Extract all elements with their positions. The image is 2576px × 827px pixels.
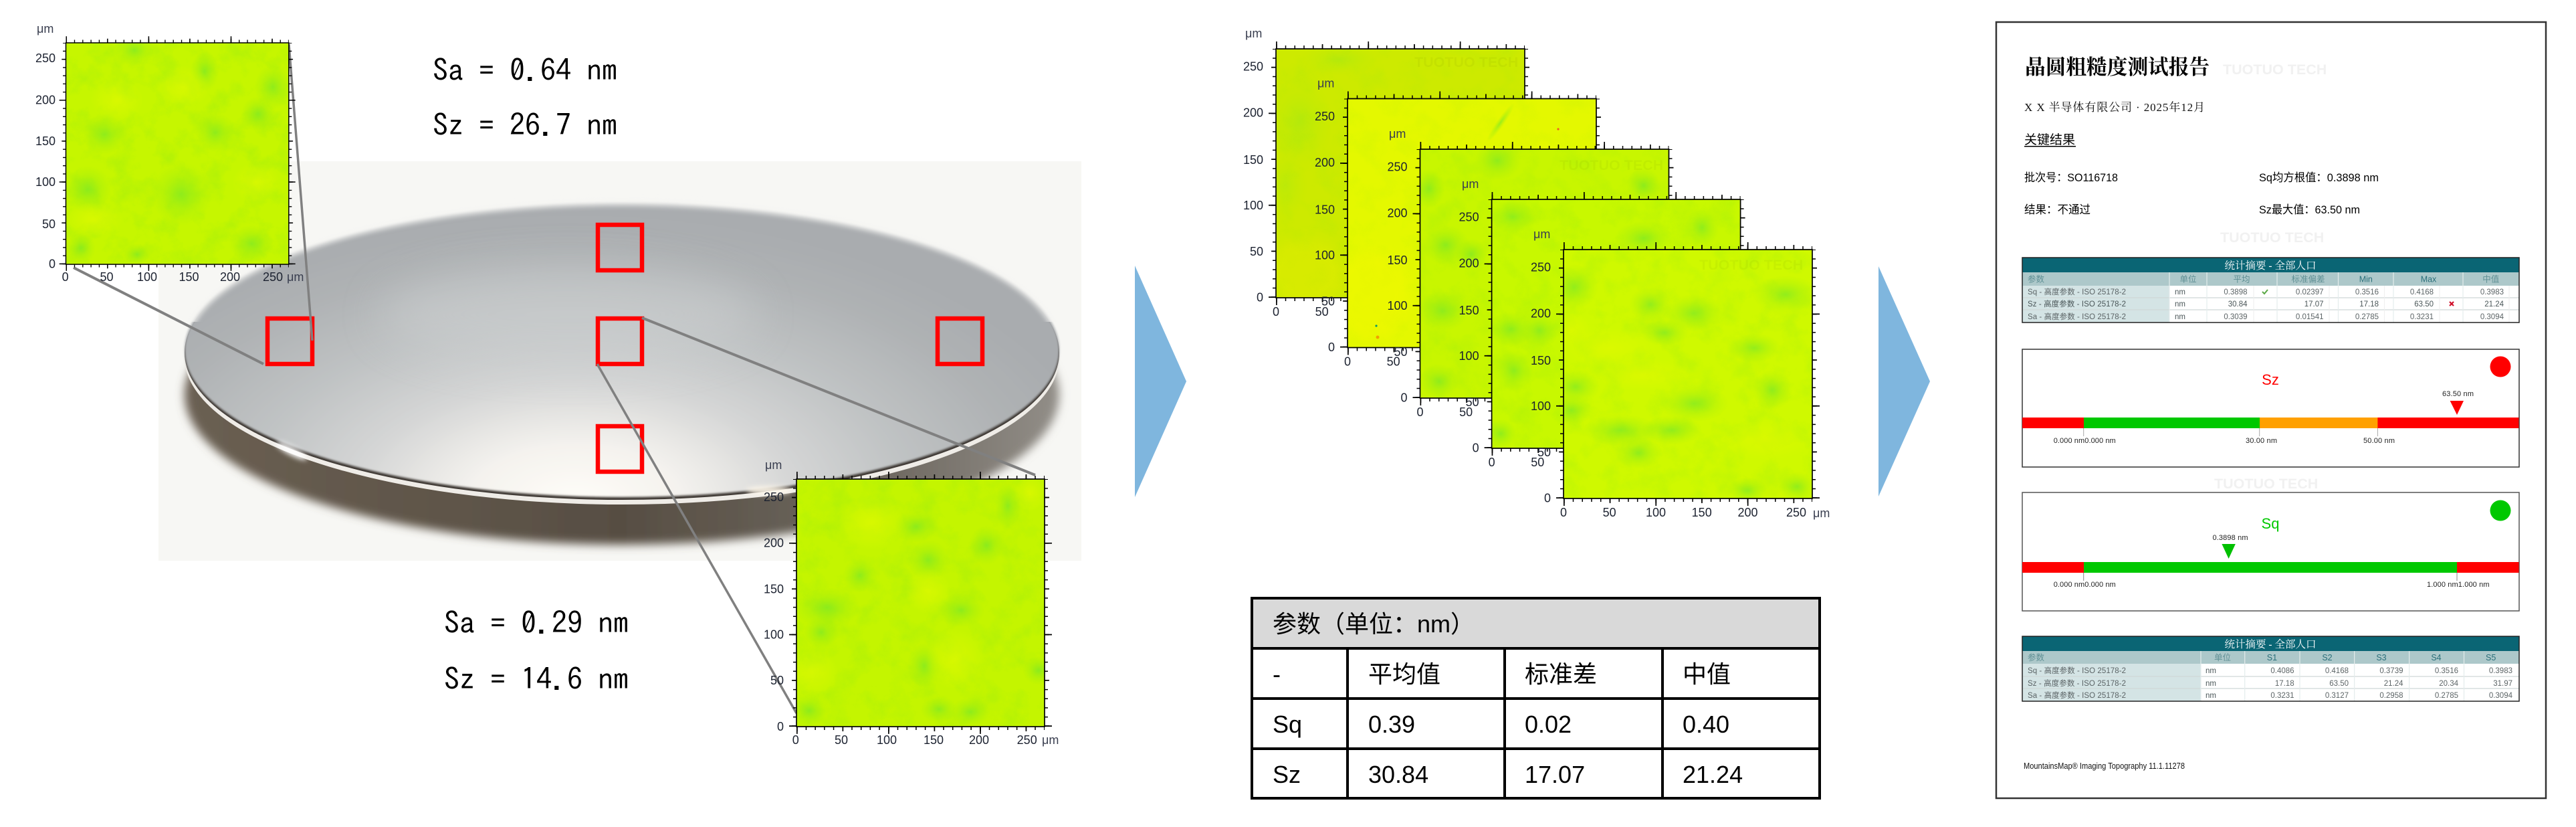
surface map: bottom right: 100 bbox=[877, 733, 897, 747]
map S3: 250 bbox=[1387, 161, 1407, 174]
surface map: top left: 100 bbox=[137, 270, 157, 284]
roughness values: top bbox=[433, 55, 617, 140]
map S5: 150 bbox=[1692, 506, 1712, 519]
surface map: top left: 0 bbox=[49, 257, 56, 270]
statistics summary table: 63.50 bbox=[2414, 300, 2434, 308]
per-sample table: 0.3516 bbox=[2435, 667, 2458, 675]
per-sample table: Sq - 高度参数 - ISO 25178-2 bbox=[2028, 666, 2126, 675]
statistics summary table: 21.24 bbox=[2484, 300, 2504, 308]
arrow: maps to report bbox=[1879, 266, 1930, 496]
Sq gauge: 1.000 nm1.000 nm bbox=[2427, 581, 2489, 589]
surface map: top left: 150 bbox=[179, 270, 199, 284]
roughness values: top: Sa = 0.64 nm bbox=[433, 55, 617, 85]
map S1: 0 bbox=[1257, 290, 1263, 304]
surface map: bottom right: 0 bbox=[792, 733, 799, 747]
statistics summary table: Sq - 高度参数 - ISO 25178-2 bbox=[2028, 287, 2126, 296]
per-sample table: S4 bbox=[2431, 653, 2442, 662]
statistics summary table: 17.18 bbox=[2359, 300, 2379, 308]
table: parameter statistics: 平均值 bbox=[1368, 660, 1440, 688]
statistics summary table: 0.01541 bbox=[2296, 313, 2323, 321]
Sz gauge: 63.50 nm bbox=[2442, 390, 2474, 398]
arrow: wafer to maps bbox=[1135, 266, 1186, 497]
table: parameter statistics: 21.24 bbox=[1683, 761, 1743, 788]
surface map: top left: 250 bbox=[263, 270, 283, 284]
surface map: bottom right: 150 bbox=[924, 733, 944, 747]
per-sample table: S3 bbox=[2376, 653, 2387, 662]
statistics summary table: 0.3898 bbox=[2224, 288, 2247, 296]
per-sample table: 17.18 bbox=[2275, 680, 2294, 688]
statistics summary table: 17.07 bbox=[2304, 300, 2323, 308]
marker: Sz value bbox=[2450, 401, 2464, 415]
map S5: 50 bbox=[1603, 506, 1616, 519]
Sz gauge: 0.000 nm0.000 nm bbox=[2054, 437, 2116, 445]
per-sample table: 单位 bbox=[2214, 652, 2231, 662]
surface map: bottom right: 200 bbox=[764, 537, 784, 550]
per-sample table: 0.3127 bbox=[2325, 692, 2349, 700]
Sq gauge bbox=[2022, 492, 2519, 611]
report title: 晶圆粗糙度测试报告 bbox=[2025, 56, 2210, 79]
statistics summary table: 参数 bbox=[2028, 274, 2045, 284]
map S5: μm bbox=[1813, 507, 1830, 520]
table: parameter statistics: - bbox=[1273, 660, 1281, 688]
per-sample table: 0.4086 bbox=[2270, 667, 2294, 675]
table: parameter statistics: 0.39 bbox=[1368, 711, 1415, 738]
status light red bbox=[2490, 356, 2510, 377]
statistics summary table: 30.84 bbox=[2228, 300, 2248, 308]
wafer photo bbox=[158, 161, 1081, 561]
roughness values: bottom bbox=[444, 608, 629, 694]
surface map: bottom right bbox=[764, 458, 1059, 747]
table: parameter statistics: 标准差 bbox=[1525, 660, 1597, 688]
icon: pass check bbox=[2262, 290, 2268, 294]
statistics summary table bbox=[2022, 258, 2519, 323]
map S3 bbox=[1387, 127, 1673, 419]
table: parameter statistics: 参数（单位：nm） bbox=[1273, 610, 1475, 638]
statistics summary table: Sz - 高度参数 - ISO 25178-2 bbox=[2028, 299, 2126, 308]
map S5: 200 bbox=[1737, 506, 1758, 519]
red sampling boxes bbox=[267, 225, 982, 472]
statistics summary table: 0.3039 bbox=[2224, 313, 2247, 321]
surface map: bottom right: 50 bbox=[770, 674, 784, 687]
map S2: 50 bbox=[1387, 355, 1400, 368]
per-sample table: 0.3094 bbox=[2489, 692, 2513, 700]
zoom callout lines bbox=[74, 44, 1035, 713]
per-sample table: 0.3739 bbox=[2379, 667, 2403, 675]
statistics summary table: 0.3983 bbox=[2480, 288, 2504, 296]
surface map: bottom right: μm bbox=[765, 458, 782, 472]
table: parameter statistics: 中值 bbox=[1683, 660, 1731, 688]
statistics summary table: 标准偏差 bbox=[2291, 274, 2325, 284]
Sq gauge: 0.000 nm0.000 nm bbox=[2054, 581, 2116, 589]
key results: Sq均方根值：0.3898 nm bbox=[2259, 171, 2379, 184]
map S5 bbox=[1531, 227, 1830, 520]
map S3: 150 bbox=[1387, 254, 1407, 267]
map S2: 100 bbox=[1315, 249, 1335, 262]
icon: fail cross bbox=[2450, 302, 2454, 306]
per-sample table: 0.3983 bbox=[2489, 667, 2512, 675]
per-sample table: 0.4168 bbox=[2325, 667, 2349, 675]
map S3: 100 bbox=[1387, 299, 1407, 312]
per-sample table: 21.24 bbox=[2384, 680, 2403, 688]
surface map: top left: 200 bbox=[220, 270, 240, 284]
key results: 结果：不通过 bbox=[2024, 203, 2090, 216]
map S1: 0 bbox=[1273, 305, 1279, 318]
Sq gauge: Sq bbox=[2262, 515, 2279, 532]
map S3: 50 bbox=[1394, 345, 1407, 359]
report watermarks: TUOTUO TECH bbox=[2220, 229, 2324, 246]
per-sample table: 31.97 bbox=[2493, 680, 2512, 688]
table: parameter statistics bbox=[1252, 598, 1820, 798]
Sz gauge bbox=[2022, 349, 2519, 467]
map S3: 0 bbox=[1400, 391, 1407, 404]
map S4: 100 bbox=[1459, 349, 1479, 363]
map S4 bbox=[1459, 177, 1744, 469]
per-sample table: Sz - 高度参数 - ISO 25178-2 bbox=[2028, 678, 2126, 688]
per-sample table: 63.50 bbox=[2329, 680, 2349, 688]
surface map: top left: 200 bbox=[35, 94, 56, 107]
statistics summary table: 0.4168 bbox=[2410, 288, 2434, 296]
per-sample table: nm bbox=[2206, 680, 2216, 688]
surface map: bottom right: 0 bbox=[777, 720, 784, 733]
statistics summary table: nm bbox=[2175, 288, 2185, 296]
surface map: top left: μm bbox=[287, 270, 304, 284]
statistics summary table: nm bbox=[2175, 313, 2185, 321]
Sz gauge: Sz bbox=[2262, 371, 2279, 388]
roughness values: top: Sz = 26.7 nm bbox=[433, 110, 617, 140]
per-sample table bbox=[2022, 636, 2519, 701]
key results bbox=[2024, 171, 2379, 216]
surface map: top left: 150 bbox=[35, 134, 56, 148]
statistics summary table: Sa - 高度参数 - ISO 25178-2 bbox=[2028, 312, 2126, 321]
per-sample table: 0.3231 bbox=[2270, 692, 2294, 700]
map S4: 250 bbox=[1459, 210, 1479, 223]
map S5: 250 bbox=[1531, 261, 1551, 274]
surface map: bottom right: 50 bbox=[835, 733, 848, 747]
report subtitle: X X 半导体有限公司 · 2025年12月 bbox=[2024, 100, 2205, 114]
roughness values: bottom: Sz = 14.6 nm bbox=[444, 664, 629, 694]
map S4: 150 bbox=[1459, 304, 1479, 317]
map S1: TUOTUO TECH bbox=[1414, 54, 1518, 70]
status light green bbox=[2490, 500, 2510, 521]
statistics summary table: 平均 bbox=[2233, 274, 2250, 284]
Sz gauge: 30.00 nm bbox=[2246, 437, 2277, 445]
per-sample table: nm bbox=[2206, 667, 2216, 675]
surface map: top left: μm bbox=[37, 22, 53, 35]
Sq gauge: 0.3898 nm bbox=[2212, 534, 2248, 542]
key results: Sz最大值：63.50 nm bbox=[2259, 203, 2360, 216]
statistics summary table: nm bbox=[2175, 300, 2185, 308]
statistics summary table: Min bbox=[2359, 274, 2373, 284]
per-sample table: 0.2958 bbox=[2379, 692, 2403, 700]
map S3: μm bbox=[1389, 127, 1406, 141]
panel: five stacked surface maps bbox=[1243, 27, 1830, 520]
per-sample table: 参数 bbox=[2028, 652, 2045, 662]
statistics summary table: 0.02397 bbox=[2296, 288, 2323, 296]
map S1: 150 bbox=[1243, 153, 1263, 167]
statistics summary table: 0.3516 bbox=[2355, 288, 2379, 296]
map S2: 0 bbox=[1344, 355, 1351, 368]
map S5: 0 bbox=[1544, 491, 1551, 504]
statistics summary table: 0.3231 bbox=[2410, 313, 2434, 321]
table: parameter statistics: Sz bbox=[1273, 761, 1301, 788]
map S4: 0 bbox=[1489, 456, 1495, 469]
map S4: 0 bbox=[1473, 442, 1479, 455]
statistics summary table: Max bbox=[2421, 274, 2437, 284]
map S3: 200 bbox=[1387, 206, 1407, 219]
per-sample table: S1 bbox=[2267, 653, 2277, 662]
map S1: 200 bbox=[1243, 106, 1263, 119]
map S5: 0 bbox=[1560, 506, 1567, 519]
surface map: top left: 0 bbox=[62, 270, 69, 284]
map S1 bbox=[1243, 27, 1529, 318]
statistics summary table: 0.3094 bbox=[2480, 313, 2504, 321]
per-sample table: S2 bbox=[2322, 653, 2333, 662]
statistics summary table: 0.2785 bbox=[2355, 313, 2379, 321]
surface map: top left: 50 bbox=[100, 270, 114, 284]
table: parameter statistics: 30.84 bbox=[1368, 761, 1428, 788]
key results: 批次号：SO116718 bbox=[2024, 171, 2118, 184]
Sz gauge: 50.00 nm bbox=[2363, 437, 2395, 445]
per-sample table: 20.34 bbox=[2439, 680, 2459, 688]
key results heading: 关键结果 bbox=[2024, 132, 2075, 147]
surface map: bottom right: μm bbox=[1042, 733, 1059, 747]
map S5: 200 bbox=[1531, 306, 1551, 320]
per-sample table: S5 bbox=[2486, 653, 2496, 662]
map S2: 150 bbox=[1315, 203, 1335, 217]
marker: Sq value bbox=[2222, 544, 2236, 559]
panel: roughness report page bbox=[1996, 22, 2546, 798]
surface map: bottom right: 200 bbox=[969, 733, 989, 747]
surface map: bottom right: 150 bbox=[764, 582, 784, 595]
surface map: top left: 50 bbox=[42, 217, 56, 231]
table: parameter statistics: 0.02 bbox=[1525, 711, 1572, 738]
map S5: μm bbox=[1533, 227, 1550, 241]
panel: wafer with sampling points bbox=[35, 22, 1081, 747]
surface map: top left: 100 bbox=[35, 175, 56, 189]
statistics summary table: 中值 bbox=[2482, 274, 2499, 284]
per-sample table: 0.2785 bbox=[2435, 692, 2458, 700]
table: parameter statistics: Sq bbox=[1273, 711, 1302, 738]
map S5: 100 bbox=[1646, 506, 1666, 519]
map S3: 0 bbox=[1416, 405, 1424, 419]
map S2: μm bbox=[1317, 76, 1334, 90]
map S4: 200 bbox=[1459, 257, 1479, 270]
map S5: 50 bbox=[1537, 446, 1551, 459]
map S5: 100 bbox=[1531, 399, 1551, 413]
table: parameter statistics: 0.40 bbox=[1683, 711, 1729, 738]
surface map: bottom right: 250 bbox=[1017, 733, 1037, 747]
surface map: bottom right: 100 bbox=[764, 628, 784, 641]
map S2: 0 bbox=[1328, 341, 1335, 354]
map S2 bbox=[1315, 76, 1600, 368]
report watermarks bbox=[2214, 62, 2327, 492]
map S2: 250 bbox=[1315, 110, 1335, 123]
map S4: 50 bbox=[1466, 395, 1479, 409]
map S1: 100 bbox=[1243, 199, 1263, 212]
surface map: top left bbox=[35, 22, 304, 284]
map S3: TUOTUO TECH bbox=[1560, 157, 1663, 173]
table: parameter statistics: 17.07 bbox=[1525, 761, 1585, 788]
per-sample table: Sa - 高度参数 - ISO 25178-2 bbox=[2028, 691, 2126, 700]
map S3: 50 bbox=[1459, 405, 1473, 419]
map S1: 250 bbox=[1243, 60, 1263, 74]
report footer: MountainsMap® Imaging Topography 11.1.11278 bbox=[2024, 761, 2185, 771]
report watermarks: TUOTUO TECH bbox=[2223, 62, 2327, 78]
map S5: TUOTUO TECH bbox=[1699, 257, 1803, 273]
map S5: 150 bbox=[1531, 354, 1551, 367]
map S2: 50 bbox=[1321, 294, 1335, 308]
roughness values: bottom: Sa = 0.29 nm bbox=[444, 608, 629, 638]
map S1: μm bbox=[1245, 27, 1262, 40]
per-sample table: nm bbox=[2206, 692, 2216, 700]
map S1: 50 bbox=[1250, 245, 1263, 258]
map S4: 50 bbox=[1531, 456, 1544, 469]
per-sample table: 统计摘要 - 全部人口 bbox=[2225, 638, 2316, 650]
report watermarks: TUOTUO TECH bbox=[2214, 476, 2318, 492]
surface map: bottom right: 250 bbox=[764, 490, 784, 504]
statistics summary table: 单位 bbox=[2179, 274, 2197, 284]
map S2: 200 bbox=[1315, 156, 1335, 169]
map S4: μm bbox=[1462, 177, 1479, 191]
map S1: 50 bbox=[1315, 305, 1329, 318]
statistics summary table: 统计摘要 - 全部人口 bbox=[2225, 260, 2316, 272]
map S5: 250 bbox=[1786, 506, 1806, 519]
surface map: top left: 250 bbox=[35, 52, 56, 65]
